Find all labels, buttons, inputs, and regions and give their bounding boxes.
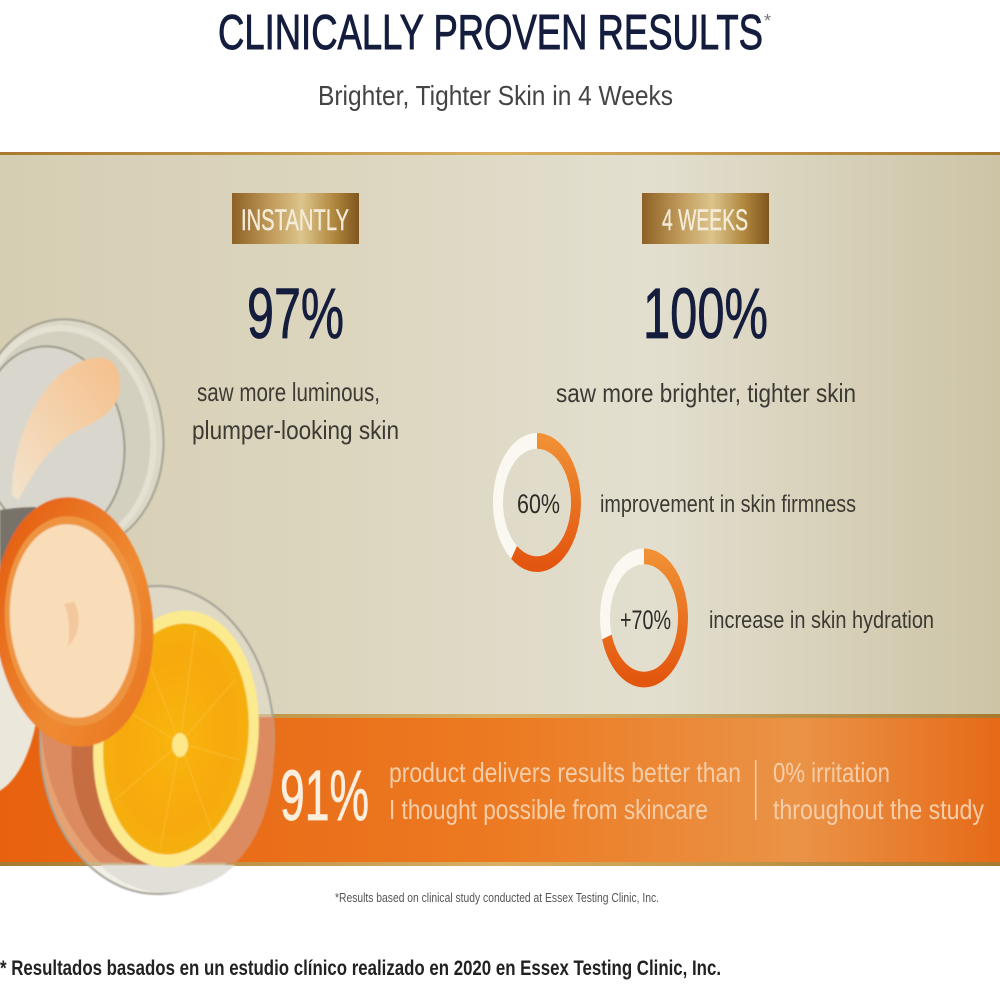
footnote: spanish: * Resultados basados en un estudio clínico realizado en 2020 en Essex Testing Clinic, Inc. — [0, 957, 721, 980]
text: 0% irritation: 0% irritation — [773, 757, 890, 788]
clear jar lid with cream smear — [0, 307, 178, 590]
label: 60%: 60% — [517, 489, 560, 519]
text: product delivers results: I thought possible from skincare — [389, 794, 708, 825]
badge: instantly — [232, 193, 359, 244]
text: product delivers results: product delivers results better than — [389, 757, 741, 788]
description: luminous skin: saw more luminous, — [197, 377, 380, 407]
stat: 97%: 97% — [247, 275, 344, 354]
description: brighter skin: saw more brighter, tighter skin — [556, 378, 856, 408]
label: +70%: +70% — [620, 605, 671, 635]
title: CLINICALLY PROVEN RESULTS — [218, 6, 763, 60]
text: 0% irritation — [773, 757, 984, 825]
panel: 4 weeks column — [498, 193, 934, 680]
stat: 91%: 91% — [280, 757, 369, 836]
badge: 4 weeks: 4 WEEKS — [662, 204, 748, 237]
badge: 4 weeks — [642, 193, 769, 244]
chart: +70% hydration ring — [605, 556, 683, 680]
title asterisk: * — [764, 11, 771, 31]
panel: beige results background — [0, 152, 1000, 717]
chart: 60% firmness ring — [498, 441, 576, 564]
label: improvement in skin firmness: improvement in skin firmness — [600, 491, 856, 518]
white jar base — [0, 565, 40, 795]
subtitle: Brighter, Tighter Skin in 4 Weeks — [318, 80, 673, 111]
description: luminous skin: plumper-looking skin — [192, 415, 399, 445]
orange slice — [79, 601, 273, 877]
panel: instantly column — [192, 193, 399, 445]
orange jar with cream — [0, 491, 164, 753]
footnote: english: *Results based on clinical study conducted at Essex Testing Clinic, Inc. — [335, 890, 659, 905]
panel: orange band background — [0, 714, 1000, 866]
description: luminous skin — [192, 377, 399, 445]
label: increase in skin hydration: increase in skin hydration — [709, 607, 934, 634]
image: cosmetic jars and orange slice — [0, 307, 274, 894]
text: product delivers results — [389, 757, 741, 825]
badge: instantly: INSTANTLY — [241, 204, 349, 237]
stat: 100%: 100% — [643, 275, 768, 354]
clear jar with orange slice — [40, 586, 274, 894]
